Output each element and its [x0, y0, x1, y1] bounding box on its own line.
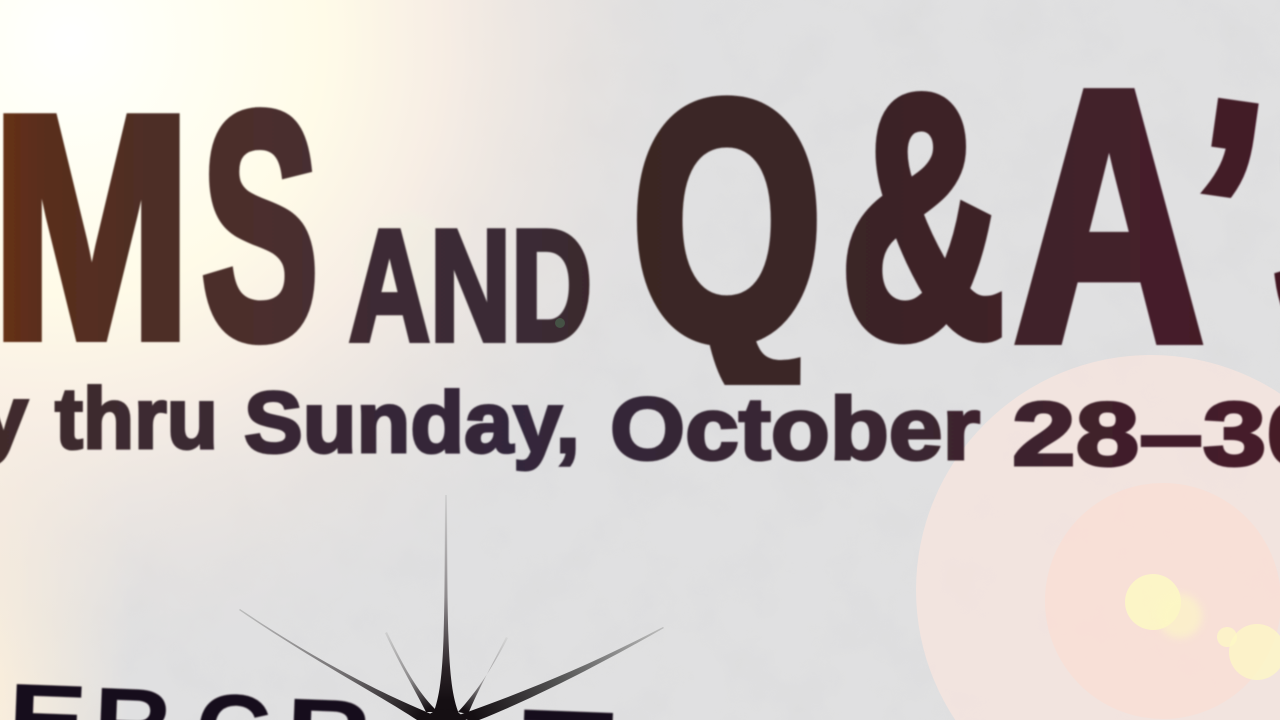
subheading: date line: 28–30	[1012, 385, 1280, 485]
lens flare: bright spots	[1125, 574, 1280, 680]
ampersand and A: &	[840, 24, 1005, 408]
subheading: date line: thru	[55, 371, 218, 467]
word fragment: MS: S	[201, 47, 319, 406]
letter: Q: Q	[632, 34, 822, 409]
ampersand and A: A	[1014, 18, 1204, 415]
subheading: date line: October	[610, 379, 980, 478]
word fragment: MS	[2, 106, 316, 346]
lens flare: small green dot	[555, 318, 565, 328]
apostrophe and cut-off S	[1200, 96, 1280, 306]
heading: FILMS AND Q&A'S	[2, 87, 1280, 386]
logo: starburst	[239, 495, 664, 720]
faint flare near AND	[355, 212, 455, 312]
subheading: date line: Sunday,	[244, 375, 580, 471]
logo: cropped wordmark	[14, 683, 614, 720]
subheading: date line	[0, 382, 1280, 472]
ampersand and A	[845, 87, 1204, 346]
word: AND: AND	[349, 198, 592, 374]
lens flare: large halo	[916, 355, 1280, 720]
lens flare: inner halo	[1045, 483, 1280, 719]
